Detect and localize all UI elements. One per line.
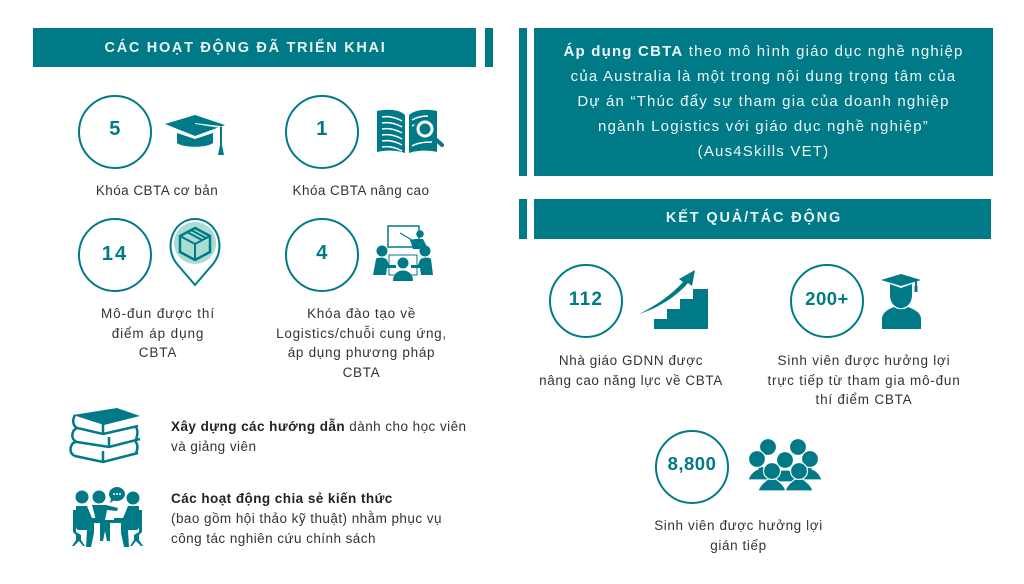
icon: crowd (748, 439, 822, 490)
label: students indirect: gián tiếp (710, 538, 767, 552)
icon: graduate (881, 274, 921, 329)
stat: 112 teachers: 112 (569, 288, 603, 310)
text: guides (171, 418, 467, 454)
icon: graduation cap (165, 115, 225, 155)
label: logistics courses (276, 306, 447, 380)
stat: 1 advanced course: 1 (316, 118, 328, 140)
icon: map pin with parcel (170, 218, 220, 286)
icon: people meeting (72, 487, 143, 547)
stat: 200+ students: 200+ (805, 288, 849, 308)
label: teachers: nâng cao năng lực về CBTA (539, 372, 723, 388)
label: modules: CBTA (139, 345, 177, 360)
heading: results: KẾT QUẢ/TÁC ĐỘNG (666, 210, 842, 226)
label: modules (101, 306, 215, 360)
stat: 4 logistics courses: 4 (316, 242, 328, 264)
text: knowledge sharing: Các hoạt động chia sẻ kiến thức (171, 491, 393, 506)
stat: 8,800 students (655, 430, 729, 504)
panel: project intro: Dự án “Thúc đẩy sự tham gia của doanh nghiệp (577, 93, 950, 110)
text: guides: và giảng viên (171, 439, 256, 454)
label: logistics courses: Khóa đào tạo về (307, 306, 416, 321)
label: students indirect: Sinh viên được hưởng lợi (654, 518, 823, 533)
results accent bar (519, 199, 527, 239)
label: students indirect (654, 518, 823, 553)
stat: 14 modules: 14 (102, 242, 128, 264)
label: logistics courses: Logistics/chuỗi cung ứng, (276, 326, 447, 340)
panel: project intro: (Aus4Skills VET) (698, 143, 829, 160)
icon: open book with magnifier (377, 110, 444, 153)
heading: activities (33, 28, 476, 67)
icon: rising stairs (639, 270, 708, 329)
label: students direct: Sinh viên được hưởng lợi (778, 353, 950, 368)
text: knowledge sharing (171, 491, 442, 546)
heading: results (534, 199, 991, 239)
label: students direct: trực tiếp từ tham gia mô-đun (768, 372, 960, 388)
label: modules: điểm áp dụng (112, 326, 204, 340)
text: knowledge sharing: (bao gồm hội thảo kỹ thuật) nhằm phục vụ (171, 511, 442, 526)
stat: 200+ students (790, 264, 864, 338)
stat: 8,800 students: 8,800 (668, 452, 716, 474)
panel: project intro (534, 28, 993, 176)
heading: activities: CÁC HOẠT ĐỘNG ĐÃ TRIỂN KHAI (105, 40, 386, 56)
heading accent bar (485, 28, 493, 67)
stat: 5 basic courses (78, 95, 152, 169)
intro accent bar (519, 28, 527, 176)
label: students direct (768, 353, 960, 407)
stat: 112 teachers (549, 264, 623, 338)
label: modules: Mô-đun được thí (101, 306, 215, 321)
icon: classroom (373, 225, 433, 281)
panel: project intro: của Australia là một trong nội dung trọng tâm của (571, 68, 956, 85)
icon: stacked books (69, 408, 140, 464)
stat: 14 modules (78, 218, 152, 292)
label: teachers: Nhà giáo GDNN được (559, 353, 703, 368)
label: students direct: thí điểm CBTA (816, 392, 912, 407)
stat: 1 advanced course (285, 95, 359, 169)
label: teachers (539, 353, 723, 388)
text: knowledge sharing: công tác nghiên cứu chính sách (171, 531, 376, 546)
label: logistics courses: CBTA (343, 364, 380, 380)
stat: 4 logistics courses (285, 218, 359, 292)
label: advanced course: Khóa CBTA nâng cao (293, 183, 429, 198)
panel: project intro: ngành Logistics với giáo dục nghề nghiệp” (598, 118, 929, 135)
label: basic courses: Khóa CBTA cơ bản (96, 183, 218, 198)
text: guides: Xây dựng các hướng dẫn dành cho học viên (171, 419, 467, 434)
label: logistics courses: áp dụng phương pháp (288, 345, 435, 360)
stat: 5 basic courses: 5 (109, 118, 121, 140)
panel: project intro: Áp dụng CBTA theo mô hình giáo dục nghề nghiệp (563, 43, 964, 60)
